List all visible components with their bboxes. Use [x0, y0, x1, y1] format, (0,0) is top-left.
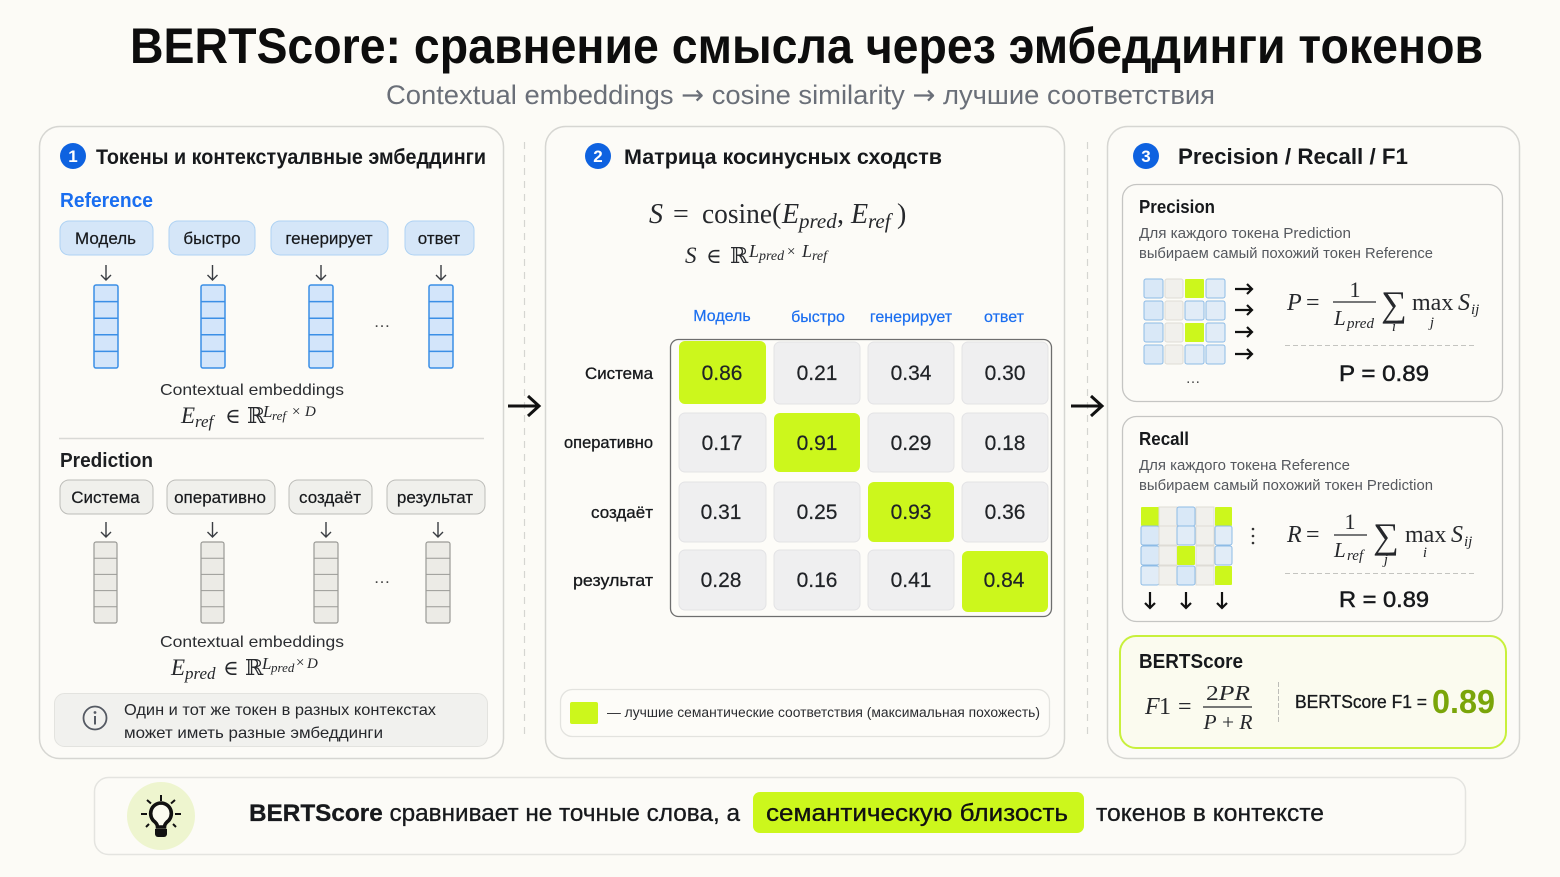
- mini matrix: [1141, 507, 1232, 585]
- column arrows: [1145, 592, 1227, 608]
- panel: tokens and embeddings: [40, 126, 504, 758]
- row labels: оперативно: [564, 434, 653, 452]
- f1 label: BERTScore F1 =: [1295, 692, 1427, 712]
- reference tokens: ответ: [418, 229, 460, 248]
- cosine formula: cosine: [702, 199, 772, 230]
- takeaway text: BERTScore сравнивает не точные слова, а: [249, 800, 741, 827]
- reference formula: ref: [195, 412, 216, 431]
- prediction formula: pred: [184, 664, 216, 683]
- card heading: Precision: [1139, 197, 1215, 217]
- reference formula: L: [262, 402, 272, 421]
- card: bertscore: [1120, 636, 1506, 748]
- panel heading: Токены и контекстуалвные эмбеддинги: [96, 146, 486, 169]
- similarity matrix: 0.86: [702, 362, 742, 385]
- precision formula: [1286, 277, 1479, 335]
- prediction formula: ×: [296, 655, 304, 671]
- vertical dots: [1252, 528, 1254, 544]
- similarity matrix: 0.28: [701, 569, 741, 592]
- similarity matrix: 0.29: [891, 432, 931, 455]
- legend: [560, 690, 1050, 736]
- prediction formula: [170, 654, 318, 683]
- reference formula: ℝ: [247, 403, 266, 428]
- precision formula: L: [1333, 306, 1346, 330]
- similarity matrix: 0.34: [891, 362, 932, 385]
- highlighted phrase: [753, 792, 1084, 833]
- cosine formula: S: [649, 199, 663, 230]
- reference embedding vectors: …: [374, 312, 390, 331]
- card heading: Recall: [1139, 429, 1189, 449]
- precision formula: j: [1428, 315, 1434, 331]
- recall formula: S: [1451, 522, 1463, 548]
- cosine formula: pred: [797, 209, 837, 233]
- recall formula: ∑: [1373, 516, 1399, 556]
- step badge 2: [585, 143, 611, 169]
- cosine formula: ): [897, 199, 906, 230]
- recall formula: R: [1286, 522, 1302, 548]
- info note: [54, 694, 488, 746]
- recall formula: [1286, 509, 1472, 568]
- card: precision: [1122, 184, 1502, 402]
- column headers: [693, 308, 1025, 326]
- matrix dimension formula: S: [685, 243, 697, 268]
- precision formula: i: [1392, 319, 1396, 335]
- step badge 3: 3: [1141, 147, 1151, 166]
- column headers: ответ: [984, 309, 1025, 326]
- f1 formula: =: [1178, 694, 1192, 720]
- f1 formula: 1: [1159, 694, 1171, 720]
- prediction tokens: [60, 480, 485, 514]
- cosine formula: E: [781, 199, 799, 230]
- cosine formula: ,: [837, 199, 844, 230]
- reference formula: D: [304, 404, 316, 420]
- bottom takeaway bar: [94, 778, 1466, 854]
- matrix dimension formula: [685, 241, 829, 268]
- recall value: R = 0.89: [1339, 587, 1429, 612]
- recall formula: =: [1306, 522, 1320, 548]
- panel: similarity matrix: [546, 126, 1064, 758]
- row labels: результат: [573, 572, 653, 590]
- similarity matrix: 0.17: [702, 432, 742, 455]
- row labels: создаёт: [591, 504, 653, 522]
- reference tokens: быстро: [183, 229, 241, 248]
- mini matrix: [1144, 279, 1225, 387]
- precision formula: P: [1286, 290, 1302, 316]
- matrix dimension formula: ∈: [706, 244, 722, 268]
- reference formula: [180, 402, 316, 431]
- title: BERTScore: сравнение смысла через эмбеддинги токенов: [130, 18, 1483, 74]
- row arrows: [1235, 284, 1252, 359]
- description: Для каждого токена Prediction: [1139, 226, 1351, 242]
- similarity matrix: 0.31: [701, 501, 741, 524]
- reference arrows: [101, 265, 446, 280]
- reference formula: ×: [292, 404, 300, 420]
- prediction embedding vectors: …: [374, 568, 390, 587]
- card heading: BERTScore: [1139, 651, 1243, 673]
- recall formula: i: [1423, 545, 1427, 561]
- similarity matrix: [670, 340, 1052, 616]
- prediction formula: D: [306, 656, 318, 672]
- recall formula: 1: [1344, 509, 1356, 534]
- matrix dimension formula: L: [801, 241, 812, 261]
- prediction tokens: оперативно: [174, 488, 266, 507]
- precision formula: =: [1306, 290, 1320, 316]
- precision formula: 1: [1350, 277, 1360, 302]
- prediction formula: pred: [270, 660, 295, 675]
- similarity matrix: 0.93: [891, 501, 931, 524]
- f1 formula: 2PR: [1206, 681, 1250, 705]
- matrix dimension formula: ref: [812, 249, 829, 264]
- similarity matrix: 0.25: [797, 501, 837, 524]
- similarity matrix: 0.21: [797, 362, 837, 385]
- reference caption: Contextual embeddings: [160, 382, 344, 399]
- recall formula: ref: [1347, 548, 1365, 564]
- reference formula: E: [180, 403, 195, 428]
- precision formula: max: [1412, 290, 1453, 316]
- description: Для каждого токена Reference: [1139, 458, 1350, 474]
- reference tokens: Модель: [75, 229, 136, 248]
- cosine formula: [649, 199, 906, 233]
- arrow: panel 1 to panel 2: [508, 396, 539, 416]
- subtitle: Contextual embeddings → cosine similarity → лучшие соответствия: [386, 80, 1215, 111]
- step badge 2: 2: [593, 147, 603, 166]
- cosine formula: E: [850, 199, 868, 230]
- reference tokens: генерирует: [285, 229, 373, 248]
- similarity matrix: 0.36: [985, 501, 1025, 524]
- divider dashed 2: [1086, 142, 1088, 740]
- prediction formula: E: [170, 655, 185, 680]
- cosine formula: =: [673, 199, 689, 230]
- recall formula: ij: [1464, 534, 1472, 550]
- panel heading: Precision / Recall / F1: [1178, 144, 1408, 169]
- reference embedding vectors: [94, 285, 453, 368]
- reference label: Reference: [60, 190, 153, 212]
- f1 formula: [1144, 681, 1253, 734]
- similarity matrix: 0.30: [985, 362, 1025, 385]
- legend: — лучшие семантические соответствия (максимальная похожесть): [607, 705, 1040, 720]
- takeaway ending: токенов в контексте: [1096, 800, 1324, 827]
- similarity matrix: 0.16: [797, 569, 837, 592]
- prediction embedding vectors: [94, 542, 450, 623]
- note text: Один и тот же токен в разных контекстах: [124, 702, 436, 719]
- prediction formula: L: [261, 654, 271, 673]
- arrow: panel 2 to panel 3: [1071, 396, 1102, 416]
- similarity matrix: 0.18: [985, 432, 1025, 455]
- row labels: [564, 365, 654, 590]
- reference formula: ref: [272, 408, 288, 423]
- prediction formula: ℝ: [245, 655, 264, 680]
- similarity matrix: 0.84: [984, 569, 1025, 592]
- precision value: P = 0.89: [1339, 361, 1429, 386]
- precision formula: pred: [1346, 316, 1374, 332]
- highlighted phrase: семантическую близость: [766, 800, 1068, 827]
- column headers: генерирует: [870, 309, 953, 326]
- column headers: Модель: [693, 308, 751, 325]
- description: выбираем самый похожий токен Prediction: [1139, 478, 1433, 494]
- panel: precision recall f1: [1108, 126, 1520, 758]
- precision formula: S: [1458, 290, 1470, 316]
- divider dashed 1: [524, 142, 526, 740]
- cosine formula: (: [772, 199, 781, 230]
- f1 formula: P + R: [1202, 710, 1253, 734]
- similarity matrix: 0.91: [797, 432, 837, 455]
- precision formula: ij: [1471, 302, 1479, 318]
- prediction tokens: создаёт: [299, 488, 361, 507]
- step badge 1: 1: [68, 147, 78, 166]
- step badge 1: [60, 143, 86, 169]
- cosine formula: ref: [868, 209, 894, 233]
- prediction tokens: результат: [397, 488, 473, 507]
- description: выбираем самый похожий токен Reference: [1139, 246, 1433, 262]
- prediction formula: ∈: [223, 656, 239, 680]
- matrix dimension formula: L: [748, 241, 759, 261]
- icon: light bulb: [127, 782, 195, 850]
- precision formula: ∑: [1381, 284, 1407, 324]
- recall formula: j: [1382, 552, 1388, 568]
- step badge 3: [1133, 143, 1159, 169]
- mini matrix: …: [1186, 370, 1200, 387]
- matrix dimension formula: ×: [787, 244, 795, 260]
- row labels: Система: [585, 365, 654, 383]
- panel heading: Матрица косинусных сходств: [624, 146, 942, 169]
- f1 formula: F: [1144, 694, 1160, 720]
- prediction tokens: Система: [71, 488, 140, 507]
- f1 value: 0.89: [1432, 683, 1495, 720]
- recall formula: L: [1333, 538, 1346, 562]
- reference tokens: [60, 221, 474, 255]
- note text: может иметь разные эмбеддинги: [124, 725, 383, 742]
- card: recall: [1122, 416, 1502, 622]
- icon: info: [84, 706, 106, 730]
- prediction label: Prediction: [60, 450, 153, 472]
- matrix dimension formula: pred: [758, 249, 785, 264]
- prediction caption: Contextual embeddings: [160, 634, 344, 651]
- recall formula: max: [1405, 522, 1446, 548]
- matrix dimension formula: ℝ: [730, 243, 749, 268]
- prediction arrows: [101, 522, 443, 537]
- column headers: быстро: [791, 309, 845, 326]
- similarity matrix: 0.41: [891, 569, 931, 592]
- reference formula: ∈: [225, 404, 241, 428]
